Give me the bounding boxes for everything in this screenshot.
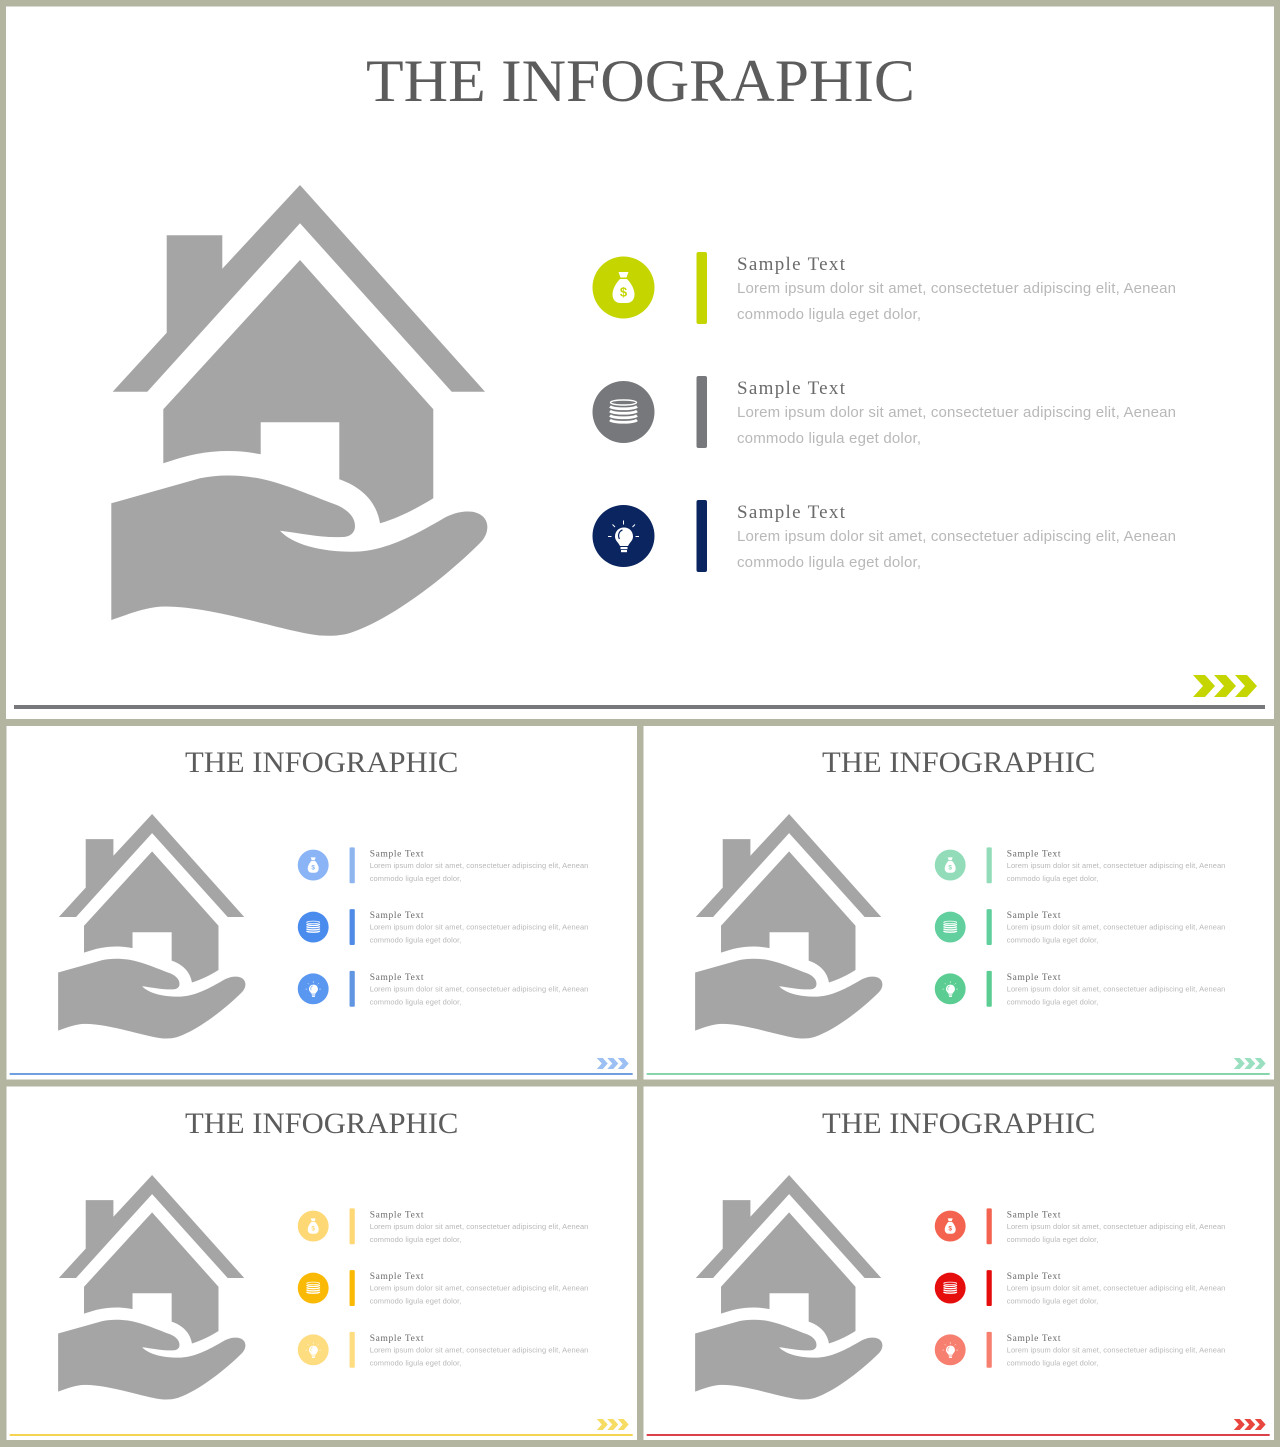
text block 3: Sample Text xyxy=(370,973,424,983)
icon: light bulb xyxy=(935,973,966,1004)
accent bar 2 xyxy=(350,909,355,945)
title: THE INFOGRAPHIC xyxy=(185,746,458,779)
text block 3: commodo ligula eget dolor, xyxy=(737,554,921,571)
footer line xyxy=(10,1434,633,1436)
footer line xyxy=(647,1073,1270,1075)
accent bar 3 xyxy=(696,500,707,572)
arrow: chevrons xyxy=(1234,1419,1266,1430)
text block 2 xyxy=(1007,1272,1225,1306)
text block 3 xyxy=(370,1334,588,1367)
text block 3 xyxy=(1007,973,1225,1006)
text block 3: commodo ligula eget dolor, xyxy=(1007,997,1098,1006)
panel: red slide xyxy=(644,1086,1274,1440)
icon: house on hand xyxy=(695,1175,882,1400)
accent bar 3 xyxy=(350,971,355,1007)
footer line xyxy=(647,1434,1270,1436)
accent bar 2 xyxy=(987,909,992,945)
text block 3: Lorem ipsum dolor sit amet, consectetuer adipiscing elit, Aenean xyxy=(370,1345,588,1354)
text block 3: Sample Text xyxy=(370,1334,424,1344)
icon: coins xyxy=(592,381,654,443)
text block 1: commodo ligula eget dolor, xyxy=(737,306,921,323)
text block 1: Sample Text xyxy=(370,1210,424,1220)
icon: money bag xyxy=(935,1211,966,1242)
arrow: chevrons xyxy=(597,1419,629,1430)
text block 2: commodo ligula eget dolor, xyxy=(370,1297,461,1306)
text block 2: Lorem ipsum dolor sit amet, consectetuer adipiscing elit, Aenean xyxy=(1007,923,1225,932)
icon: light bulb xyxy=(298,1334,329,1365)
text block 2: Lorem ipsum dolor sit amet, consectetuer adipiscing elit, Aenean xyxy=(370,923,588,932)
text block 2 xyxy=(737,378,1176,447)
text block 1: Sample Text xyxy=(737,254,846,275)
text block 1 xyxy=(370,1210,588,1244)
text block 2: commodo ligula eget dolor, xyxy=(1007,936,1098,945)
text block 1: commodo ligula eget dolor, xyxy=(370,874,461,883)
arrow: chevrons xyxy=(1234,1058,1266,1069)
text block 1: Lorem ipsum dolor sit amet, consectetuer adipiscing elit, Aenean xyxy=(1007,861,1225,870)
text block 1: Sample Text xyxy=(370,849,424,859)
text block 3: Lorem ipsum dolor sit amet, consectetuer adipiscing elit, Aenean xyxy=(1007,1345,1225,1354)
icon: house on hand xyxy=(111,185,487,636)
panel: green slide xyxy=(644,726,1274,1080)
accent bar 1 xyxy=(987,847,992,883)
text block 3 xyxy=(370,973,588,1006)
text block 1: Sample Text xyxy=(1007,1210,1061,1220)
text block 3: commodo ligula eget dolor, xyxy=(1007,1358,1098,1367)
accent bar 2 xyxy=(696,376,707,448)
accent bar 1 xyxy=(696,252,707,324)
text block 1: commodo ligula eget dolor, xyxy=(1007,874,1098,883)
text block 2: Lorem ipsum dolor sit amet, consectetuer adipiscing elit, Aenean xyxy=(370,1284,588,1293)
text block 1: commodo ligula eget dolor, xyxy=(370,1235,461,1244)
text block 1: Lorem ipsum dolor sit amet, consectetuer adipiscing elit, Aenean xyxy=(737,280,1176,297)
accent bar 1 xyxy=(350,847,355,883)
icon: house on hand xyxy=(695,814,882,1039)
text block 1: Lorem ipsum dolor sit amet, consectetuer adipiscing elit, Aenean xyxy=(370,861,588,870)
text block 1: commodo ligula eget dolor, xyxy=(1007,1235,1098,1244)
text block 1: Lorem ipsum dolor sit amet, consectetuer adipiscing elit, Aenean xyxy=(1007,1222,1225,1231)
footer line xyxy=(14,705,1265,709)
icon: coins xyxy=(298,1273,329,1304)
icon: money bag xyxy=(298,1211,329,1242)
text block 3: commodo ligula eget dolor, xyxy=(370,1358,461,1367)
icon: money bag xyxy=(935,850,966,881)
icon: house on hand xyxy=(58,1175,245,1400)
text block 2: Lorem ipsum dolor sit amet, consectetuer adipiscing elit, Aenean xyxy=(1007,1284,1225,1293)
text block 3: commodo ligula eget dolor, xyxy=(370,997,461,1006)
text block 2: Sample Text xyxy=(1007,911,1061,921)
icon: light bulb xyxy=(935,1334,966,1365)
text block 3: Lorem ipsum dolor sit amet, consectetuer adipiscing elit, Aenean xyxy=(737,528,1176,545)
panel: yellow slide xyxy=(6,1086,637,1440)
text block 1 xyxy=(370,849,588,883)
text block 2: Lorem ipsum dolor sit amet, consectetuer adipiscing elit, Aenean xyxy=(737,404,1176,421)
text block 2: commodo ligula eget dolor, xyxy=(370,936,461,945)
accent bar 2 xyxy=(350,1270,355,1306)
text block 2 xyxy=(370,1272,588,1306)
text block 2: Sample Text xyxy=(370,1272,424,1282)
accent bar 1 xyxy=(987,1208,992,1244)
accent bar 3 xyxy=(987,971,992,1007)
text block 2: Sample Text xyxy=(370,911,424,921)
text block 3 xyxy=(1007,1334,1225,1367)
text block 2 xyxy=(1007,911,1225,945)
title: THE INFOGRAPHIC xyxy=(822,1107,1095,1140)
text block 3: Sample Text xyxy=(1007,973,1061,983)
text block 1 xyxy=(1007,849,1225,883)
text block 1: Sample Text xyxy=(1007,849,1061,859)
text block 3: Sample Text xyxy=(737,502,846,523)
arrow: chevrons xyxy=(1193,675,1257,697)
text block 3: Sample Text xyxy=(1007,1334,1061,1344)
accent bar 3 xyxy=(987,1332,992,1368)
text block 1 xyxy=(737,254,1176,323)
footer line xyxy=(10,1073,633,1075)
accent bar 2 xyxy=(987,1270,992,1306)
text block 3 xyxy=(737,502,1176,571)
title: THE INFOGRAPHIC xyxy=(822,746,1095,779)
title: THE INFOGRAPHIC xyxy=(366,48,915,114)
icon: coins xyxy=(935,912,966,943)
icon: money bag xyxy=(592,256,654,318)
panel: blue slide xyxy=(6,726,637,1080)
text block 2: Sample Text xyxy=(737,378,846,399)
icon: coins xyxy=(935,1273,966,1304)
icon: light bulb xyxy=(592,505,654,567)
title: THE INFOGRAPHIC xyxy=(185,1107,458,1140)
text block 3: Lorem ipsum dolor sit amet, consectetuer adipiscing elit, Aenean xyxy=(370,984,588,993)
panel: main slide xyxy=(6,6,1274,719)
text block 2 xyxy=(370,911,588,945)
text block 2: Sample Text xyxy=(1007,1272,1061,1282)
text block 2: commodo ligula eget dolor, xyxy=(1007,1297,1098,1306)
accent bar 1 xyxy=(350,1208,355,1244)
icon: money bag xyxy=(298,850,329,881)
arrow: chevrons xyxy=(597,1058,629,1069)
icon: coins xyxy=(298,912,329,943)
icon: light bulb xyxy=(298,973,329,1004)
accent bar 3 xyxy=(350,1332,355,1368)
text block 3: Lorem ipsum dolor sit amet, consectetuer adipiscing elit, Aenean xyxy=(1007,984,1225,993)
text block 1: Lorem ipsum dolor sit amet, consectetuer adipiscing elit, Aenean xyxy=(370,1222,588,1231)
text block 1 xyxy=(1007,1210,1225,1244)
text block 2: commodo ligula eget dolor, xyxy=(737,430,921,447)
icon: house on hand xyxy=(58,814,245,1039)
